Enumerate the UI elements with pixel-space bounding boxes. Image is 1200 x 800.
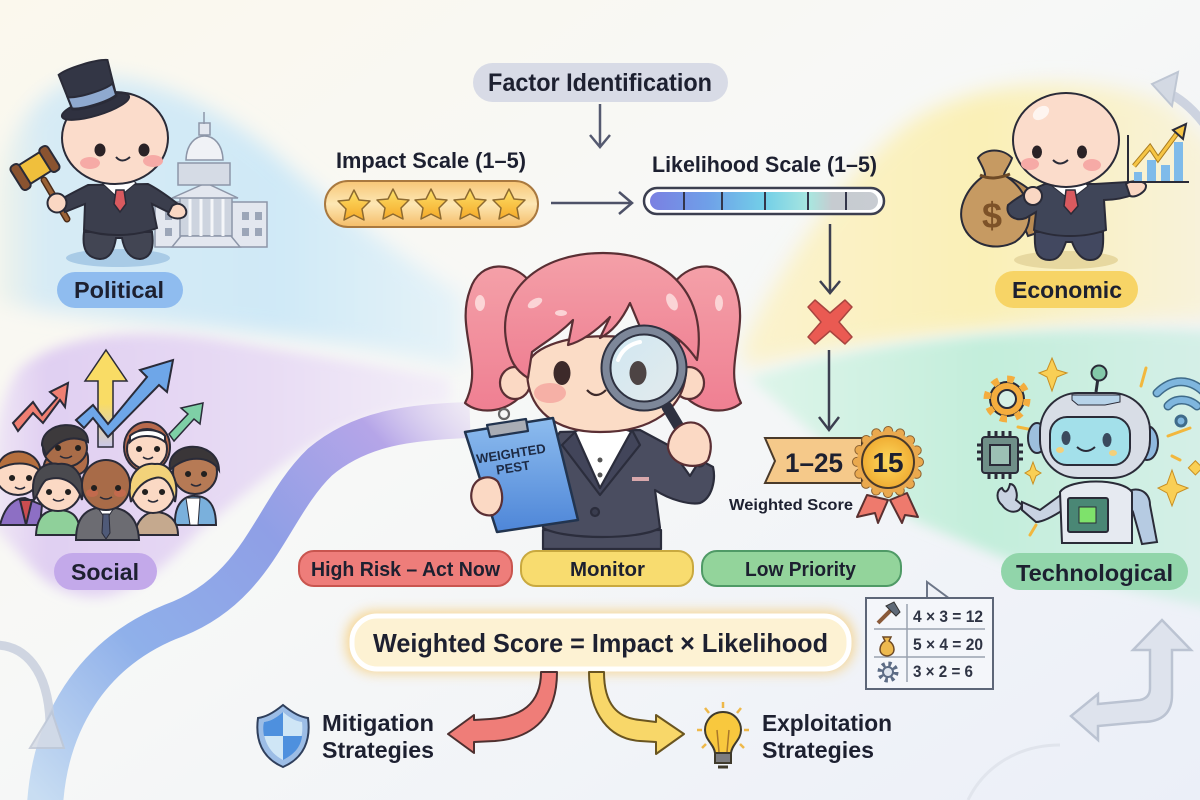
face [527, 336, 686, 432]
pill: low priority: Low Priority [745, 559, 857, 581]
medal: 15 [872, 447, 904, 478]
text: exploitation strategies: Strategies [762, 737, 874, 763]
text: mitigation strategies: Strategies [322, 737, 434, 763]
robot arms [998, 484, 1157, 544]
formula [346, 611, 854, 673]
decorative arrow: top right [1152, 72, 1200, 125]
icon: light bulb [697, 702, 749, 767]
icon: multiply sign [808, 300, 852, 344]
robot torso [1060, 482, 1132, 543]
label: economic [995, 271, 1138, 308]
character: technological [977, 358, 1200, 544]
clipboard [465, 409, 578, 532]
panel: political background wedge [0, 77, 462, 368]
text: mitigation strategies [322, 710, 434, 763]
pill: monitor [521, 551, 693, 586]
row: money score: 5 × 4 = 20 [913, 635, 983, 654]
icon: top hat [49, 54, 132, 125]
impact star scale [325, 181, 538, 227]
label: technological: Technological [1016, 560, 1173, 586]
arrow: multiply to score [819, 350, 839, 430]
clipboard: PEST [495, 458, 531, 478]
label: political [57, 272, 183, 308]
icon: blue trend arrow [76, 360, 173, 437]
magnifying glass [606, 330, 700, 462]
flow ribbon [45, 420, 470, 800]
panel: technological background wedge [750, 330, 1200, 610]
character: economic [961, 93, 1189, 269]
panel: social background wedge [0, 334, 450, 597]
icon: microchip [977, 431, 1023, 479]
text: mitigation strategies: Mitigation [322, 710, 434, 736]
jacket and legs [60, 184, 178, 259]
hand holding magnifier [668, 422, 711, 466]
heading: factor identification [473, 63, 728, 102]
pill: high risk [299, 551, 512, 586]
icon: red trend arrow [13, 383, 68, 431]
pigtail left [465, 266, 530, 411]
icon: hammer [878, 602, 900, 623]
central character: analyst girl [465, 253, 741, 549]
banner: score range: 1–25 [785, 448, 843, 478]
icon: money bag [961, 150, 1040, 247]
heading: impact scale: Impact Scale (1–5) [336, 148, 526, 173]
hand holding clipboard [471, 477, 502, 515]
icon: money bag small [880, 637, 894, 656]
arrow: likelihood to multiply [820, 224, 840, 293]
robot chest chip [1068, 498, 1108, 532]
medal ribbons [857, 493, 918, 523]
character: political [9, 54, 267, 267]
icon: gear [987, 379, 1027, 419]
icon: wifi [1157, 382, 1200, 426]
chart: rising bars [1128, 124, 1189, 182]
label: technological [1001, 553, 1188, 590]
worked examples table [866, 582, 993, 689]
robot head [1028, 366, 1158, 478]
decorative arrow: bottom left [0, 645, 64, 748]
arrow: factor to scales [590, 104, 610, 147]
icon: gear small [880, 664, 896, 680]
arrow: to mitigation [448, 672, 557, 753]
jacket and legs [1007, 182, 1135, 260]
label: social [54, 553, 157, 590]
decorative arrow: bottom right [968, 620, 1191, 800]
icon: shield [257, 705, 309, 767]
icon: capitol building [155, 112, 267, 247]
hair with fringe [505, 253, 699, 378]
text: exploitation strategies [762, 710, 892, 763]
pigtail right [675, 266, 741, 411]
icon: money bag: $ [982, 195, 1002, 236]
pill: high risk: High Risk – Act Now [311, 559, 500, 581]
ear left [500, 367, 530, 399]
medal [857, 431, 919, 493]
skirt and jacket [543, 428, 714, 549]
hair shine [475, 292, 723, 316]
heading: likelihood scale: Likelihood Scale (1–5) [652, 152, 877, 177]
label: political: Political [74, 277, 164, 303]
character group: social [0, 350, 219, 540]
banner: score range [765, 438, 862, 483]
row: gear score: 3 × 2 = 6 [913, 662, 973, 681]
status pills [299, 551, 901, 586]
formula: Weighted Score = Impact × Likelihood [373, 628, 828, 658]
row: hammer score: 4 × 3 = 12 [913, 607, 983, 626]
label: economic: Economic [1012, 277, 1122, 303]
people [0, 422, 219, 540]
label: weighted score: Weighted Score [729, 497, 853, 514]
weighted score badge [729, 431, 919, 523]
arrow: to exploitation [589, 672, 684, 754]
pill: monitor: Monitor [570, 559, 645, 581]
text: exploitation strategies: Exploitation [762, 710, 892, 736]
icon: gavel [9, 144, 67, 219]
heading: factor identification: Factor Identification [488, 69, 712, 97]
arrow: impact to likelihood [551, 192, 632, 214]
pill: low priority [702, 551, 901, 586]
icon: yellow up arrow [85, 350, 127, 447]
smile [587, 390, 606, 395]
clipboard: WEIGHTED [475, 441, 547, 466]
blush [534, 383, 566, 403]
icon: sparkles [1018, 358, 1200, 535]
ear right [674, 367, 704, 399]
likelihood bar [644, 188, 884, 214]
label: social: Social [71, 559, 139, 585]
panel: economic background wedge [742, 84, 1200, 368]
icon: green trend arrow [169, 403, 203, 441]
eye left [554, 361, 570, 385]
